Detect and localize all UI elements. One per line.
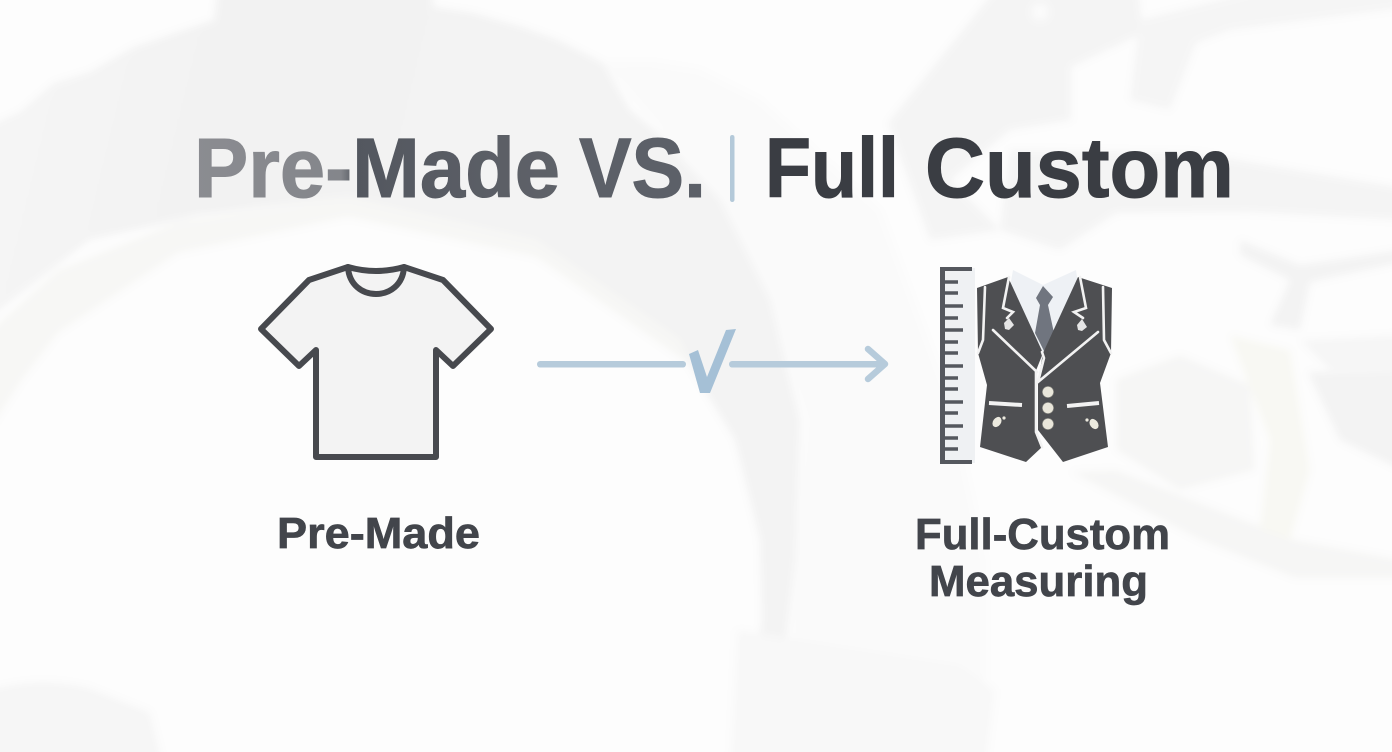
title: full custom: Custom — [925, 121, 1234, 215]
label: full-custom measuring: Full-Custom — [915, 510, 1170, 559]
title: full custom: Full — [765, 121, 899, 215]
vest left panel — [977, 277, 1043, 462]
label: full-custom measuring: Measuring — [929, 557, 1148, 606]
shirt collar — [1006, 270, 1082, 362]
icon: t-shirt — [261, 267, 491, 457]
check mark — [689, 329, 736, 393]
buttons — [1042, 386, 1054, 430]
vest right panel — [1038, 277, 1112, 462]
title: pre-made vs: Pre-Made — [194, 121, 560, 215]
arrow with check mark — [537, 329, 885, 393]
title divider — [730, 135, 734, 202]
arrow line right — [729, 361, 884, 368]
lapel pins — [1004, 318, 1087, 331]
pocket ornaments — [991, 415, 1100, 431]
title — [194, 121, 1234, 215]
arrow head — [868, 349, 885, 379]
label: full-custom measuring — [915, 510, 1170, 606]
icon: ruler — [940, 267, 975, 464]
vest piping — [978, 277, 1111, 447]
title: full custom — [765, 121, 1234, 215]
tie — [1035, 286, 1054, 351]
icon: vest with shirt and tie — [977, 270, 1112, 462]
label: pre-made: Pre-Made — [277, 509, 480, 558]
pockets — [989, 403, 1099, 406]
title: pre-made vs: VS. — [579, 121, 706, 215]
arrow line left — [537, 361, 686, 368]
